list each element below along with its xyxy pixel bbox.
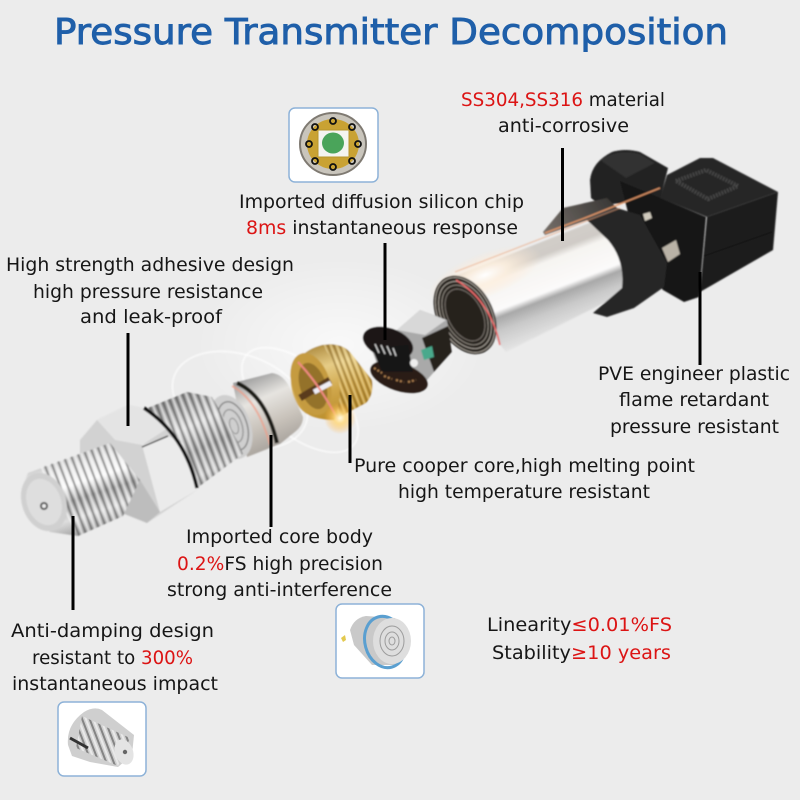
text: material <box>461 89 665 137</box>
leader line: inlet <box>72 516 74 610</box>
text: copper core <box>354 455 695 503</box>
text: plastic <box>598 363 790 438</box>
text: silicon chip <box>239 191 524 239</box>
text: silicon chip: Imported diffusion silicon chip <box>239 191 524 213</box>
text: anti-damping: instantaneous impact <box>12 673 218 695</box>
text: silicon chip: 8ms instantaneous response <box>246 217 518 239</box>
part: hex body <box>80 405 197 523</box>
text: specifications <box>487 614 672 664</box>
text: core body: 0.2%FS high precision <box>177 553 383 575</box>
text: plastic: pressure resistant <box>610 416 779 438</box>
leader line: chip <box>384 243 386 340</box>
text: adhesive design <box>6 254 294 328</box>
part: tube threaded opening <box>421 265 509 365</box>
text: core body <box>167 526 392 601</box>
text: material: anti-corrosive <box>498 115 629 137</box>
part: stainless steel tube <box>421 214 630 352</box>
part: dark wedge above tube <box>543 198 617 235</box>
leader line: core body <box>270 435 272 527</box>
soft white glow behind parts <box>159 255 490 472</box>
text: plastic: flame retardant <box>619 389 769 411</box>
part: black hex nut <box>587 208 667 317</box>
text: adhesive design: and leak-proof <box>80 306 223 328</box>
leader line: brass core <box>348 395 352 463</box>
part: connector pins <box>643 212 680 262</box>
text: specifications: Stability≥10 years <box>492 642 671 664</box>
leader line: connector <box>698 272 702 365</box>
part: black connector flange <box>620 181 706 302</box>
text: core body: Imported core body <box>186 526 373 548</box>
text: material: SS304,SS316 material <box>461 89 665 111</box>
part: circuit boards <box>359 321 432 400</box>
thumbnail: threaded inlet <box>58 702 146 776</box>
text: copper core: Pure cooper core,high melting point <box>354 455 695 477</box>
text: core body: strong anti-interference <box>167 579 392 601</box>
thumbnail: core body <box>336 604 424 678</box>
text: anti-damping <box>11 620 218 695</box>
leader line: tube <box>561 148 564 241</box>
text: adhesive design: High strength adhesive design <box>6 254 294 276</box>
text: copper core: high temperature resistant <box>398 481 650 503</box>
part: second thread section <box>148 392 243 488</box>
text: specifications: Linearity≤0.01%FS <box>487 614 672 636</box>
thumbnail: silicon chip <box>289 108 378 182</box>
light streak over tube <box>455 208 620 272</box>
leader line: hex body <box>126 333 130 426</box>
highlight: green and orange streak on nut <box>545 188 660 233</box>
text: anti-damping: resistant to 300% <box>32 647 193 669</box>
text: anti-damping: Anti-damping design <box>11 620 214 642</box>
text: adhesive design: high pressure resistance <box>33 281 263 303</box>
part: pcb silver body <box>370 310 452 385</box>
part: front threaded inlet <box>13 443 140 538</box>
part: black connector box <box>660 158 778 292</box>
part: black rear connector knob <box>590 150 668 205</box>
part: brass copper core <box>283 344 372 434</box>
part: silver core body with o-ring <box>202 373 303 465</box>
text: plastic: PVE engineer plastic <box>598 363 790 385</box>
title: Pressure Transmitter Decomposition <box>54 12 728 53</box>
exploded pressure transmitter illustration <box>13 150 778 538</box>
